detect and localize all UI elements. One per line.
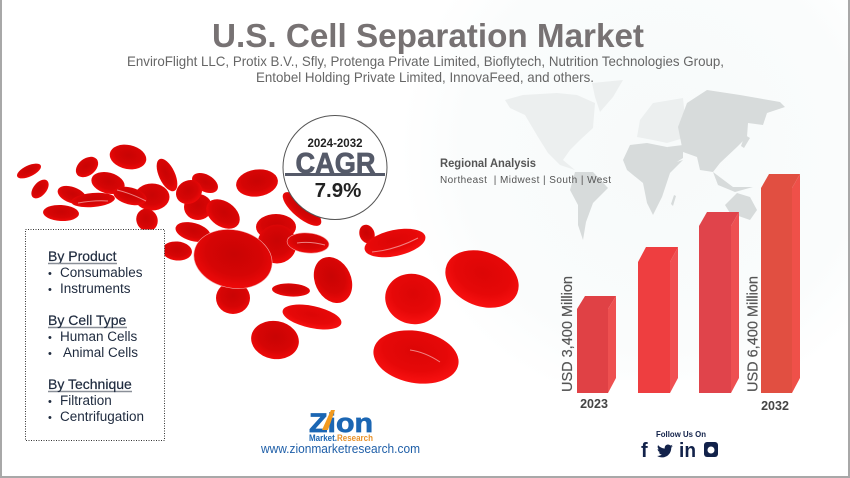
world map background: [400, 0, 850, 380]
segment list panel: •: [48, 268, 52, 280]
segment list panel: Animal Cells: [63, 345, 138, 360]
website url: www.zionmarketresearch.com: [260, 442, 420, 456]
subtitle: companies: [127, 53, 724, 85]
CAGR badge: 7.9%: [315, 179, 361, 202]
segment list panel: By Product: [48, 248, 117, 264]
bar chart: USD 3,400 Million: [560, 276, 576, 392]
bar chart: [560, 174, 800, 413]
segment list panel: Human Cells: [60, 329, 138, 344]
logo: Market.Research: [309, 433, 373, 443]
bar chart: 2023: [580, 397, 608, 411]
segment list panel: By Cell Type: [48, 312, 127, 328]
segment list panel: •: [48, 348, 52, 360]
social follow block: in: [679, 440, 696, 462]
bar chart: USD 6,400 Million: [746, 276, 762, 392]
segment list panel: By Technique: [48, 376, 132, 392]
logo: Zion: [309, 408, 373, 438]
segment list panel: [26, 230, 164, 440]
CAGR badge: CAGR: [296, 148, 376, 180]
bar chart: 2032: [761, 399, 789, 413]
segment list panel: Filtration: [60, 393, 112, 408]
subtitle: companies: EnviroFlight LLC, Protix B.V., Sfly, Protenga Private Limited, Bioflytech, Nutrition Technologies Group,: [127, 53, 724, 69]
segment list panel: •: [48, 396, 52, 408]
segment list panel: •: [48, 412, 52, 424]
segment list panel: Centrifugation: [60, 409, 144, 424]
social follow block: Follow Us On: [656, 429, 706, 439]
social follow block: [641, 429, 718, 462]
segment list panel: Consumables: [60, 265, 143, 280]
segment list panel: •: [48, 332, 52, 344]
segment list panel: •: [48, 284, 52, 296]
social follow block: f: [641, 440, 648, 462]
regional analysis: Northeast | Midwest | South | West: [440, 175, 611, 186]
CAGR badge: [283, 116, 387, 220]
subtitle: companies: Entobel Holding Private Limited, InnovaFeed, and others.: [256, 69, 594, 85]
CAGR badge: 2024-2032: [308, 138, 362, 150]
segment list panel: Instruments: [60, 281, 131, 296]
title: U.S. Cell Separation Market: [212, 17, 644, 54]
regional analysis: [440, 156, 611, 186]
blood cells illustration: [15, 141, 527, 390]
regional analysis: Regional Analysis: [440, 156, 536, 170]
